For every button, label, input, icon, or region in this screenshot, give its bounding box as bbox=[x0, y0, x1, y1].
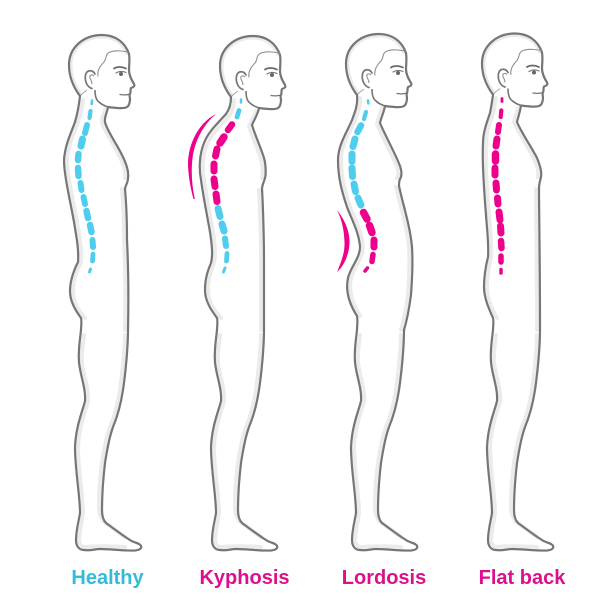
label: Lordosis: Lordosis bbox=[342, 567, 426, 589]
spine: upper pink kyphosis curve bbox=[214, 100, 241, 272]
spine: healthy curve bbox=[78, 100, 93, 272]
torso outline bbox=[200, 97, 266, 330]
label: Kyphosis: Kyphosis bbox=[199, 567, 290, 589]
figure: healthy posture bbox=[64, 35, 141, 551]
head bbox=[346, 34, 411, 107]
leg and foot outline bbox=[487, 330, 553, 551]
spine: lower pink lordosis curve bbox=[352, 100, 374, 271]
label: Flat back: Flat back bbox=[479, 567, 566, 589]
figure: flat back posture bbox=[482, 34, 553, 551]
torso outline bbox=[64, 96, 128, 330]
spine: straight pink bbox=[495, 98, 502, 273]
arc: lordosis highlight bbox=[337, 210, 350, 272]
head bbox=[69, 35, 134, 108]
torso outline bbox=[483, 94, 541, 330]
figure: lordosis posture bbox=[337, 34, 417, 551]
head bbox=[482, 34, 547, 107]
torso outline bbox=[338, 95, 412, 330]
head bbox=[220, 36, 285, 109]
leg and foot outline bbox=[211, 330, 277, 551]
leg and foot outline bbox=[351, 330, 417, 551]
leg and foot outline bbox=[75, 330, 141, 551]
figure: kyphosis posture bbox=[188, 36, 285, 551]
label: Healthy: Healthy bbox=[71, 567, 144, 589]
arc: kyphosis highlight bbox=[188, 114, 216, 199]
